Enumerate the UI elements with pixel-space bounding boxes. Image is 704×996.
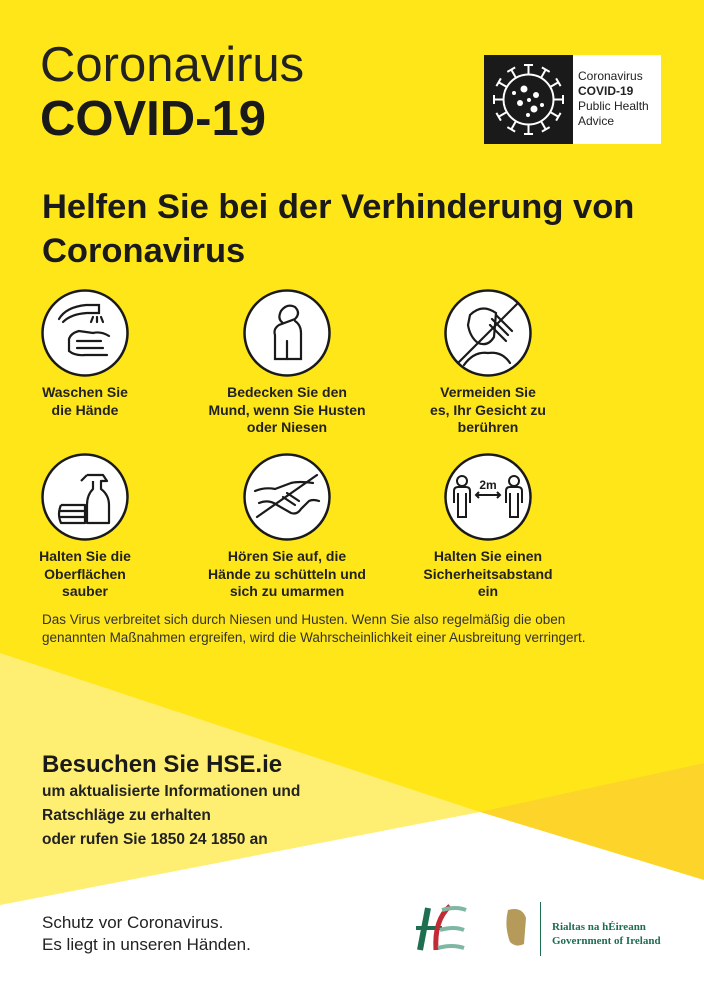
label: keep distance: ein [478, 583, 498, 599]
icon: no handshake [243, 453, 331, 541]
label: avoid touching face: Vermeiden Sie [440, 384, 536, 400]
logo: HSE [416, 904, 467, 950]
title: COVID-19 [40, 92, 266, 146]
icon: wash hands [41, 289, 129, 377]
heading: Coronavirus [42, 232, 245, 270]
heading: Helfen Sie bei der Verhinderung von [42, 188, 634, 226]
label: avoid touching face: berühren [458, 419, 518, 435]
label: cover mouth [208, 384, 366, 435]
label: clean surfaces [39, 548, 131, 599]
icon: clean surfaces [41, 453, 129, 541]
title [40, 38, 304, 146]
title: Coronavirus [40, 38, 304, 92]
text block: visit HSE [42, 751, 300, 848]
text block: virus spread: genannten Maßnahmen ergreifen, wird die Wahrscheinlichkeit einer Ausbreitung verringert. [42, 630, 586, 645]
label: clean surfaces: Halten Sie die [39, 548, 131, 564]
label: cover mouth: oder Niesen [247, 419, 327, 435]
label: avoid touching face [430, 384, 546, 435]
label: wash hands [42, 384, 128, 418]
icon: 2m distance [444, 453, 532, 541]
logo: public health advice: COVID-19 [578, 84, 633, 98]
text block: visit HSE: Besuchen Sie HSE.ie [42, 751, 282, 778]
icon: don't touch face [444, 289, 532, 377]
label: no handshake [208, 548, 366, 599]
label: wash hands: die Hände [52, 402, 118, 418]
icon: virus [484, 55, 573, 144]
logo: Government of Ireland: Rialtas na hÉireann [552, 921, 646, 933]
label: keep distance: Halten Sie einen [434, 548, 542, 564]
label: no handshake: Hände zu schütteln und [208, 566, 366, 582]
logo: Government of Ireland: Government of Ireland [552, 935, 661, 947]
icon: 2m distance: 2m [479, 478, 497, 492]
label: clean surfaces: Oberflächen [44, 566, 126, 582]
heading [42, 188, 634, 270]
text block: visit HSE: oder rufen Sie 1850 24 1850 an [42, 831, 268, 848]
logo: public health advice: Public Health [578, 99, 649, 113]
label: keep distance: Sicherheitsabstand [423, 566, 553, 582]
text block: virus spread [42, 612, 586, 645]
logo: public health advice: Coronavirus [578, 69, 643, 83]
logo: public health advice [484, 55, 661, 144]
logo: Government of Ireland [506, 902, 661, 956]
label: no handshake: Hören Sie auf, die [228, 548, 346, 564]
slogan: Es liegt in unseren Händen. [42, 935, 251, 954]
logo: public health advice: Advice [578, 114, 614, 128]
label: cover mouth: Mund, wenn Sie Husten [208, 402, 366, 418]
text block: virus spread: Das Virus verbreitet sich durch Niesen und Husten. Wenn Sie also regelmäßig die oben [42, 612, 565, 627]
label: no handshake: sich zu umarmen [230, 583, 344, 599]
label: keep distance [423, 548, 553, 599]
slogan: Schutz vor Coronavirus. [42, 913, 223, 932]
slogan [42, 913, 251, 954]
text block: visit HSE: um aktualisierte Informationen und [42, 783, 300, 800]
icon: cough into elbow [243, 289, 331, 377]
label: clean surfaces: sauber [62, 583, 108, 599]
label: avoid touching face: es, Ihr Gesicht zu [430, 402, 546, 418]
label: wash hands: Waschen Sie [42, 384, 128, 400]
text block: visit HSE: Ratschläge zu erhalten [42, 807, 211, 824]
label: cover mouth: Bedecken Sie den [227, 384, 347, 400]
